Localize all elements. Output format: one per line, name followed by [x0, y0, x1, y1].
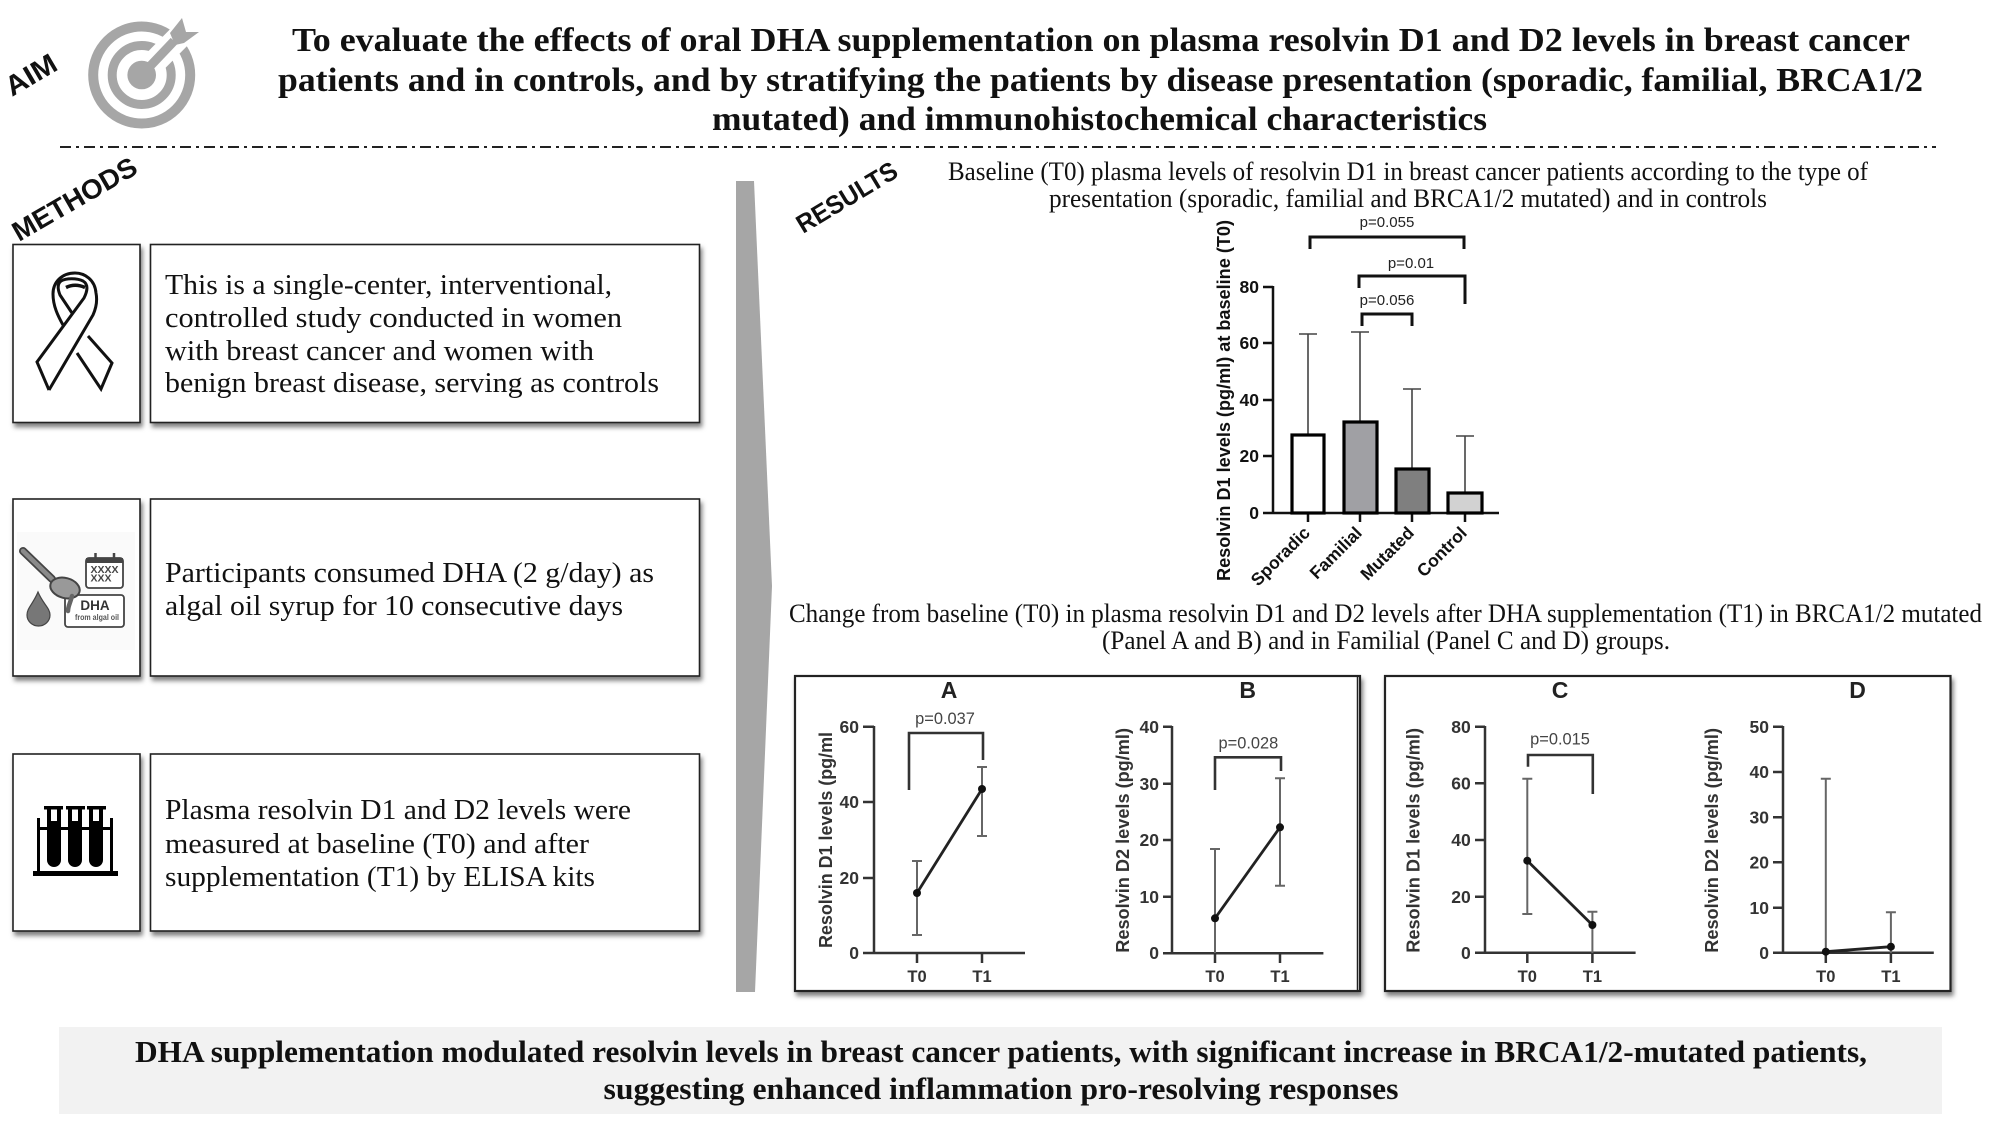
panel: methods step 3 icon [13, 754, 140, 931]
chart A: T1 [972, 968, 992, 986]
chart D: T0 [1816, 968, 1835, 986]
heading: baseline chart [948, 157, 1868, 213]
chart C: T0 [1518, 968, 1537, 986]
title [278, 22, 1923, 138]
icon: spoon, calendar and DHA syrup: DHA [80, 598, 110, 613]
chart D: 40 [1750, 762, 1769, 782]
chart A [815, 677, 1025, 986]
panel: familial charts C and D [1385, 676, 1950, 991]
conclusion banner: DHA supplementation modulated resolvin levels in breast cancer patients, with significant increase in BRCA1/2-mutated patients, [135, 1034, 1867, 1069]
conclusion banner [59, 1027, 1942, 1114]
panel: methods step 2 icon [13, 499, 140, 676]
title: mutated) and immunohistochemical characteristics [712, 101, 1487, 138]
heading: change from baseline charts [789, 599, 1982, 655]
chart C: 60 [1451, 774, 1471, 794]
panel: methods step 1 text: with breast cancer and women with [165, 335, 595, 367]
chart D: 0 [1759, 943, 1769, 963]
chart B: B [1239, 677, 1256, 703]
chart C: T1 [1583, 968, 1602, 986]
chart B: p=0.028 [1219, 734, 1278, 752]
heading: baseline chart: Baseline (T0) plasma levels of resolvin D1 in breast cancer patients according to the type of [948, 157, 1868, 186]
chart C: 40 [1451, 830, 1471, 850]
bar chart: baseline resolvin D1 [1213, 214, 1499, 590]
panel: methods step 3 text: Plasma resolvin D1 and D2 levels were [165, 794, 631, 826]
bar chart: baseline resolvin D1: p=0.055 [1360, 214, 1414, 231]
bar chart: baseline resolvin D1: 80 [1240, 277, 1259, 297]
chart C [1402, 677, 1636, 986]
chart A: 20 [840, 868, 859, 888]
panel: methods step 1 text: controlled study conducted in women [165, 302, 623, 334]
arrow: methods to results [736, 181, 772, 992]
bar chart: baseline resolvin D1: p=0.056 [1360, 292, 1414, 309]
title: patients and in controls, and by stratifying the patients by disease presentation (sporadic, familial, BRCA1/2 [278, 62, 1923, 99]
panel: methods step 3 text [150, 754, 700, 931]
chart C: 0 [1461, 943, 1471, 963]
bar chart: baseline resolvin D1: 60 [1240, 333, 1259, 353]
bar chart: baseline resolvin D1: Familial [1306, 523, 1366, 583]
heading: change from baseline charts: Change from baseline (T0) in plasma resolvin D1 and D2 levels after DHA supplementation (T1) in BRCA1/2 mutated [789, 599, 1982, 628]
label: RESULTS: RESULTS [791, 155, 903, 239]
chart A: p=0.037 [915, 710, 975, 728]
bar chart: baseline resolvin D1: Sporadic [1247, 523, 1314, 590]
chart A: T0 [907, 968, 927, 986]
heading: change from baseline charts: (Panel A and B) and in Familial (Panel C and D) groups. [1102, 626, 1670, 655]
panel: methods step 2 text: algal oil syrup for 10 consecutive days [165, 590, 623, 622]
conclusion banner: suggesting enhanced inflammation pro-resolving responses [604, 1071, 1398, 1106]
chart B: T0 [1205, 968, 1225, 986]
bar chart: baseline resolvin D1: p=0.01 [1388, 255, 1434, 272]
bar chart: baseline resolvin D1: 20 [1240, 446, 1259, 466]
panel: methods step 1 text [150, 244, 700, 422]
bar chart: baseline resolvin D1: Mutated [1356, 523, 1418, 584]
chart B: 0 [1149, 943, 1159, 963]
chart B: T1 [1270, 968, 1290, 986]
bar chart: baseline resolvin D1: Resolvin D1 levels (pg/ml) at baseline (T0) [1213, 220, 1234, 581]
panel: methods step 3 text: measured at baseline (T0) and after [165, 828, 589, 860]
panel: methods step 1 text: benign breast disease, serving as controls [165, 367, 659, 399]
chart C: 80 [1451, 717, 1471, 737]
label: AIM: AIM [0, 48, 62, 102]
icon: spoon, calendar and DHA syrup: XXXX [90, 565, 119, 576]
chart C: C [1552, 677, 1568, 703]
chart B: 20 [1140, 830, 1159, 850]
bar chart: baseline resolvin D1: 0 [1249, 503, 1259, 523]
chart B [1112, 677, 1323, 986]
icon: spoon, calendar and DHA syrup [23, 551, 124, 627]
chart A: 0 [849, 943, 859, 963]
chart D: 50 [1750, 717, 1769, 737]
chart B: 10 [1140, 887, 1159, 907]
chart B: 30 [1140, 774, 1159, 794]
chart D: Resolvin D2 levels (pg/ml) [1701, 728, 1722, 953]
icon: awareness ribbon [37, 273, 112, 390]
icon: spoon, calendar and DHA syrup: from algal oil [75, 612, 119, 622]
chart D [1701, 677, 1934, 986]
chart B: 40 [1140, 717, 1159, 737]
chart A: 60 [840, 717, 859, 737]
panel: methods step 2 text: Participants consumed DHA (2 g/day) as [165, 557, 654, 589]
chart C: 20 [1451, 887, 1471, 907]
heading: baseline chart: presentation (sporadic, familial and BRCA1/2 mutated) and in controls [1049, 184, 1767, 213]
chart A: 40 [840, 792, 859, 812]
chart A: A [941, 677, 957, 703]
chart C: Resolvin D1 levels (pg/ml) [1402, 728, 1423, 953]
chart D: D [1849, 677, 1866, 703]
icon: target with arrow [93, 18, 199, 124]
icon: spoon, calendar and DHA syrup: XXX [90, 574, 112, 584]
chart D: 20 [1750, 852, 1769, 872]
chart B: Resolvin D2 levels (pg/ml) [1112, 728, 1133, 953]
chart D: 30 [1750, 808, 1769, 828]
panel: BRCA1/2 mutated charts A and B [795, 676, 1360, 991]
panel: methods step 1 text: This is a single-center, interventional, [165, 269, 612, 301]
bar chart: baseline resolvin D1: Control [1413, 523, 1471, 581]
panel: methods step 1 icon [13, 244, 140, 422]
label: METHODS: METHODS [7, 151, 142, 247]
title: To evaluate the effects of oral DHA supplementation on plasma resolvin D1 and D2 levels in breast cancer [292, 22, 1910, 59]
panel: methods step 2 text [150, 499, 700, 676]
chart D: 10 [1750, 898, 1769, 918]
icon: test tubes in rack [33, 806, 118, 876]
bar chart: baseline resolvin D1: 40 [1240, 390, 1259, 410]
chart C: p=0.015 [1530, 730, 1590, 748]
chart D: T1 [1881, 968, 1901, 986]
panel: methods step 3 text: supplementation (T1) by ELISA kits [165, 861, 595, 893]
chart A: Resolvin D1 levels (pg/ml [815, 732, 836, 948]
